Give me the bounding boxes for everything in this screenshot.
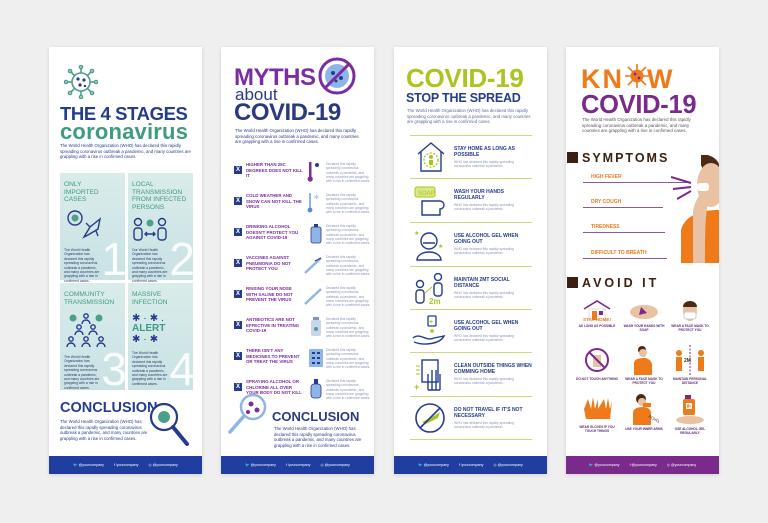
icon: alert: [132, 313, 167, 345]
subtitle: about: about: [235, 85, 278, 104]
tip 4: MAINTAIN 2MT SOCIAL DISTANCE: [454, 277, 510, 289]
myth 3: [234, 224, 370, 245]
myth 2: COLD WEATHER AND SNOW CAN NOT KILL THE VIRUS: [246, 193, 302, 209]
footer: 🐦 @yourcompany: [245, 463, 276, 467]
myth 5: [234, 286, 370, 307]
tip 6: [414, 359, 532, 392]
tip 2: WASH YOUR HANDS REGULARLY: [454, 189, 504, 201]
footer: f @yourcompany: [630, 463, 657, 467]
title: know: KNOW: [581, 64, 674, 94]
tip 1: STAY HOME AS LONG AS POSSIBLE: [454, 146, 515, 158]
subtitle: coronavirus: [60, 119, 188, 144]
item: gloves: [579, 397, 615, 433]
panel: stage 3: [60, 283, 125, 390]
panel: know covid: [566, 47, 719, 474]
subtitle: STOP THE SPREAD: [406, 91, 521, 105]
heading: avoid it: AVOID IT: [582, 276, 659, 290]
item: inner arm: USE YOUR INNER ARMS: [625, 427, 663, 431]
panel: myths: [221, 47, 374, 474]
item: stay home: [578, 300, 616, 328]
myth 6: [234, 317, 370, 338]
panel: stage 3: TRANSMISSION: [64, 299, 114, 306]
tip 5: [412, 315, 518, 345]
panel: stage 2: FROM INFECTED: [132, 196, 186, 203]
item: wash hands: [624, 305, 664, 332]
tip 7: [415, 403, 523, 433]
icon: magnifier: [228, 394, 266, 434]
item: mask: [671, 301, 709, 332]
tip 3: [414, 230, 518, 261]
panel: stage 3: 3: [101, 343, 127, 395]
title: COVID-19: [406, 63, 524, 93]
tip 4: WHO has declared this rapidly spreading coronavirus outbreak a pandemic.: [454, 291, 514, 299]
myth 2: [234, 193, 370, 214]
title: myths: MYTHS: [234, 64, 316, 91]
panel: stage 2: Our World Health Organization has declared this rapidly spreading coronavirus outbreak a pandemic, and many countries are grappling with a rise in confirmed cases.: [132, 248, 167, 283]
myth 7: THERE ISN'T ANY MEDICINES TO PREVENT OR TREAT THE VIRUS: [246, 348, 300, 364]
panel: stage 2: PERSONS: [132, 204, 164, 211]
icon: alert: ✱·✱.: [132, 313, 167, 324]
intro text: The World Health Organization (WHO) has declared this rapidly spreading coronavirus outbreak a pandemic, and many countries are grappling with a rise in confirmed cases.: [407, 108, 530, 124]
item: distance: 2M: [684, 358, 691, 364]
item: alcohol gel: USE ALCOHOL GEL REGULARLY: [675, 427, 705, 435]
icon: virus: [625, 64, 649, 88]
icon: alert: ALERT: [132, 323, 165, 334]
symptoms list: DRY COUGH: [591, 199, 621, 205]
symptoms list: DIFFICULT TO BREATH: [591, 250, 647, 256]
myth 2: Declared this rapidly spreading coronavirus outbreak a pandemic, and many countries are grappling with a rise in confirmed cases.: [326, 193, 370, 214]
symptoms list: TIREDNESS: [591, 224, 620, 230]
title: covid-19: COVID-19: [234, 99, 341, 126]
icon: magnifier: [150, 402, 190, 446]
intro text: The World Health Organization has declared this rapidly spreading coronavirus outbreak a pandemic, and many countries are grappling with a rise in confirmed cases.: [582, 117, 691, 133]
myth 6: Declared this rapidly spreading coronavirus outbreak a pandemic, and many countries are grappling with a rise in confirmed cases.: [326, 317, 370, 338]
tip 7: DO NOT TRAVEL IF IT'S NOT NECESSARY: [454, 407, 523, 419]
icon: no virus: [318, 58, 356, 94]
item: do not touch: [576, 348, 618, 381]
item: mask 2: [625, 346, 663, 385]
myth 8: X: [236, 384, 240, 390]
tip 5: +: [429, 319, 433, 326]
tip 1: WHO has declared this rapidly spreading coronavirus outbreak a pandemic.: [454, 160, 514, 168]
item: do not touch: DO NOT TOUCH ANYTHING: [576, 377, 618, 381]
myth 8: Declared this rapidly spreading coronavirus outbreak a pandemic, and many countries are grappling with a rise in confirmed cases.: [326, 379, 370, 400]
symptoms list: HIGH FEVER: [591, 174, 622, 180]
item: distance: MAINTAIN PERSONAL DISTANCE: [673, 377, 707, 385]
panel: stage 1: CASES: [64, 196, 86, 203]
footer: f /yourcompany: [114, 463, 138, 467]
panel: stage 2: TRANSMISSION: [132, 189, 182, 196]
item: inner arm: [625, 394, 663, 431]
panel: stop the spread: [394, 47, 547, 474]
footer: ◎ @yourcompany: [148, 463, 178, 467]
footer: [221, 456, 374, 474]
panel: stage 4: MASSIVE: [132, 291, 161, 298]
myth 6: X: [236, 322, 240, 328]
item: stay home: AS LONG AS POSSIBLE: [579, 324, 615, 328]
myth 8: SPRAYING ALCOHOL OR CHLORINE ALL OVER YOUR BODY DO NOT KILL IT: [246, 379, 302, 401]
myth 1: Declared this rapidly spreading coronavirus outbreak a pandemic, and many countries are grappling with a rise in confirmed cases.: [326, 162, 370, 183]
tip 1: [418, 142, 515, 172]
panel: stage 3: COMMUNITY: [64, 291, 105, 298]
panel: stage 1: 1: [101, 233, 127, 285]
item: mask: WEAR A FACE MASK TO PROTECT YOU: [671, 324, 709, 332]
myth 5: X: [236, 291, 240, 297]
tip 5: WHO has declared this rapidly spreading coronavirus outbreak a pandemic.: [454, 334, 514, 342]
myth 5: RINSING YOUR NOSE WITH SALINE DO NOT PREVENT THE VIRUS: [246, 286, 293, 302]
panel: 4 stages: [49, 47, 202, 474]
tip 6: WHO has declared this rapidly spreading coronavirus outbreak a pandemic.: [454, 377, 514, 385]
heading: symptoms: SYMPTOMS: [582, 151, 669, 165]
panel: stage 2: LOCAL: [132, 181, 154, 188]
footer: f /yourcompany: [286, 463, 310, 467]
panel: stage 4: The World Health Organization has declared this rapidly spreading coronavirus outbreak a pandemic, and many countries are grappling with a rise in confirmed cases.: [132, 351, 167, 386]
icon: virus: [64, 65, 98, 99]
panel: stage 3: The World Health Organization has declared this rapidly spreading coronavirus outbreak a pandemic, and many countries are grappling with a rise in confirmed cases.: [64, 355, 99, 390]
item: distance: [673, 345, 707, 385]
panel: stage 1: [60, 173, 125, 280]
illustration: coughing person: [671, 155, 719, 263]
icon: two people: [133, 218, 167, 241]
myth 1: HIGHER THAN 25C DEGREES DOES NOT KILL IT: [246, 162, 303, 178]
icon: alert: ✱·✱: [132, 334, 161, 345]
tip 3: USE ALCOHOL GEL WHEN GOING OUT: [454, 233, 518, 245]
panel: stage 2: [128, 173, 193, 280]
footer: f /yourcompany: [459, 463, 483, 467]
myth 1: X: [236, 167, 240, 173]
tip 6: CLEAN OUTSIDE THINGS WHEN COMMING HOME: [454, 363, 532, 375]
footer: ◎ @yourcompany: [320, 463, 350, 467]
footer: 🐦 @yourcompany: [73, 463, 104, 467]
myth 2: X: [236, 198, 240, 204]
myth 4: [234, 255, 370, 276]
avoid grid: [576, 300, 709, 435]
item: gloves: WEAR GLOVES IF YOU TOUCH THINGS: [579, 425, 615, 433]
myth 4: VACCINES AGAINST PNEUMONIA DO NOT PROTECT YOU: [246, 255, 291, 271]
myth 5: Declared this rapidly spreading coronavirus outbreak a pandemic, and many countries are grappling with a rise in confirmed cases.: [326, 286, 370, 307]
tip 3: ★: [414, 230, 419, 237]
footer: 🐦 @yourcompany: [418, 463, 449, 467]
tip 5: USE ALCOHOL GEL WHEN GOING OUT: [454, 320, 518, 332]
myth 7: Declared this rapidly spreading coronavirus outbreak a pandemic, and many countries are grappling with a rise in confirmed cases.: [326, 348, 370, 369]
conclusion text: The World Health Organization (WHO) has declared this rapidly spreading coronavirus outbreak a pandemic, and many countries are grappling with a rise in confirmed cases.: [60, 419, 147, 441]
myths list: [234, 162, 370, 401]
title: covid-19: COVID-19: [581, 91, 696, 119]
item: alcohol gel: [674, 395, 706, 435]
panel: stage 1: IMPORTED: [64, 189, 99, 196]
panel: stage 4: 4: [169, 343, 195, 395]
footer: [566, 456, 719, 474]
myth 7: [234, 348, 370, 369]
tip 4: [415, 273, 514, 305]
myth 3: DRINKING ALCOHOL DOESN'T PROTECT YOU AGAINST COVID-19: [246, 224, 298, 240]
item: stay home: STAY HOME!: [583, 317, 611, 322]
tip 3: WHO has declared this rapidly spreading coronavirus outbreak a pandemic.: [454, 247, 514, 255]
myth 3: Declared this rapidly spreading coronavirus outbreak a pandemic, and many countries are grappling with a rise in confirmed cases.: [326, 224, 370, 245]
tip 2: WHO has declared this rapidly spreading coronavirus outbreak a pandemic.: [454, 203, 514, 211]
tip 3: ★: [438, 243, 443, 250]
title: THE 4 STAGES: [60, 103, 187, 124]
heading: conclusion: CONCLUSION: [272, 409, 359, 424]
symptoms list: [583, 174, 688, 259]
item: mask 2: WEAR A FACE MASK TO PROTECT YOU: [625, 377, 663, 385]
intro text: The World Health Organization (WHO) has declared this rapidly spreading coronavirus outbreak a pandemic, and many countries are grappling with a rise in confirmed cases.: [60, 143, 191, 159]
icon: virus and plane: [67, 210, 101, 239]
footer: 🐦 @yourcompany: [589, 463, 620, 467]
myth 4: Declared this rapidly spreading coronavirus outbreak a pandemic, and many countries are grappling with a rise in confirmed cases.: [326, 255, 370, 276]
myth 4: X: [236, 260, 240, 266]
myth 7: X: [236, 353, 240, 359]
tip 2: [414, 186, 514, 216]
panel: stage 1: The World Health Organization has declared this rapidly spreading coronavirus outbreak a pandemic, and many countries are grappling with a rise in confirmed cases.: [64, 248, 99, 283]
panel: stage 2: 2: [169, 233, 195, 285]
panel: stage 1: ONLY: [64, 181, 81, 188]
myth 2: ✻: [314, 194, 319, 201]
footer: [394, 456, 547, 474]
myth 3: X: [236, 229, 240, 235]
myth 6: ANTIBIOTICS ARE NOT EFFECTIVE IN TREATING COVID-19: [246, 317, 299, 333]
heading: conclusion: CONCLUSION: [60, 400, 157, 416]
footer: [49, 456, 202, 474]
panel: stage 4: [128, 283, 193, 390]
myth 8: [234, 379, 370, 401]
tip 2: SOAP: [418, 191, 435, 197]
icon: crowd: [66, 313, 106, 347]
tip 7: WHO has declared this rapidly spreading coronavirus outbreak a pandemic.: [454, 421, 514, 429]
conclusion text: The World Health Organization (WHO) has declared this rapidly spreading coronavirus outbreak a pandemic, and many countries are grappling with a rise in confirmed cases.: [274, 426, 361, 448]
tip 6: +: [414, 382, 419, 392]
panel: stage 4: INFECTION: [132, 299, 168, 306]
item: wash hands: WASH YOUR HANDS WITH SOAP: [624, 324, 664, 332]
intro text: The World Health Organization (WHO) has declared this rapidly spreading coronavirus outbreak a pandemic, and many countries are grappling with a rise in confirmed cases.: [235, 128, 358, 144]
footer: ◎ @yourcompany: [667, 463, 696, 467]
footer: ◎ @yourcompany: [493, 463, 523, 467]
myth 1: [234, 162, 370, 183]
